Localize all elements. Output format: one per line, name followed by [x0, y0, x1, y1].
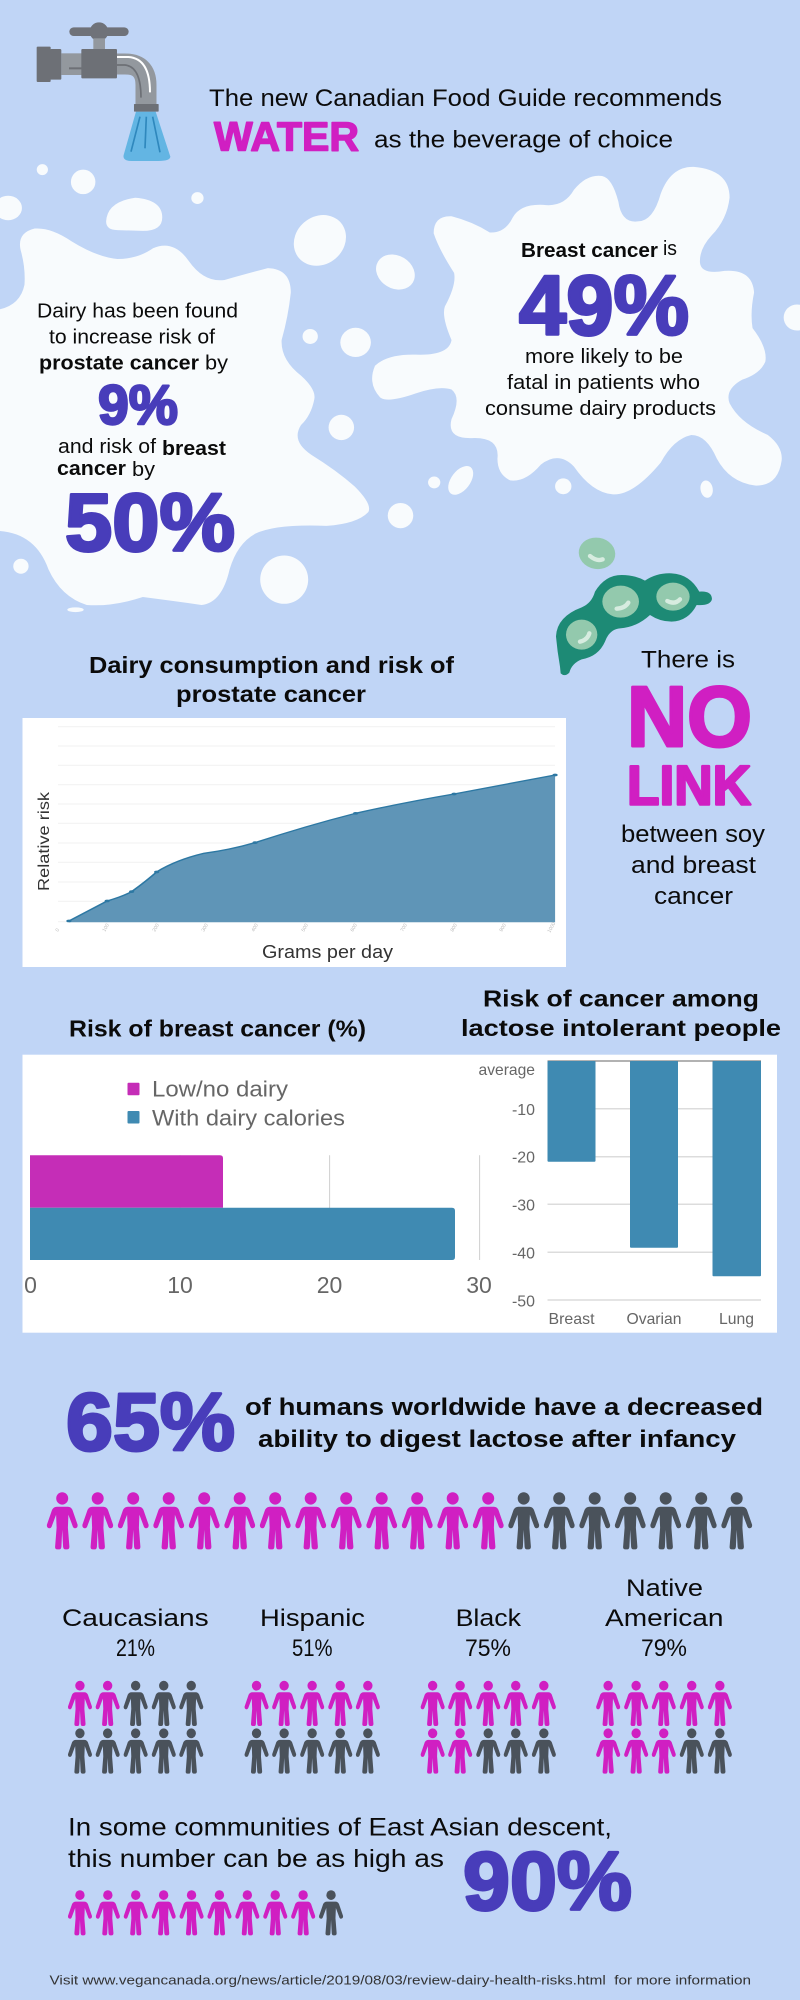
icon: soybean pod	[556, 535, 712, 675]
x axis tick labels: 300	[201, 923, 210, 933]
heading: dairy consumption chart	[89, 652, 454, 707]
callout: no link between soy and breast cancer: between soy	[621, 821, 765, 848]
group: Hispanic 51%: 51%	[292, 1635, 333, 1662]
axis values	[24, 1272, 492, 1298]
milk splash background	[0, 164, 800, 612]
x axis categories: Ovarian	[626, 1311, 682, 1328]
group: Native American 79%: 79%	[641, 1635, 687, 1662]
text block: prostate and breast risk: breast	[162, 438, 226, 460]
group: Black 75%	[421, 1605, 556, 1774]
group: Caucasians 21%: 21%	[116, 1635, 155, 1662]
bar chart: cancer risk among lactose intolerant	[478, 1061, 761, 1328]
splash: right blob	[372, 167, 782, 494]
y axis label: Relative risk	[36, 791, 53, 891]
text block: prostate and breast risk: prostate cancer	[39, 352, 199, 374]
x axis tick labels: 900	[499, 923, 508, 933]
x axis categories: Lung	[719, 1311, 754, 1328]
pictogram: 2 of 10	[68, 1681, 203, 1774]
callout: no link between soy and breast cancer	[621, 646, 765, 910]
x axis tick labels: 0	[55, 927, 61, 933]
callout: no link between soy and breast cancer: LINK	[627, 754, 751, 816]
callout: no link between soy and breast cancer: NO	[627, 670, 752, 765]
splash: left blob	[0, 228, 369, 605]
text block: breast cancer fatality: consume dairy products	[485, 398, 716, 420]
heading: risk among lactose intolerant: lactose intolerant people	[461, 1015, 781, 1041]
y axis values: -50	[512, 1294, 535, 1311]
pictogram: 5 of 10	[245, 1681, 380, 1774]
x axis tick labels: 100	[102, 923, 111, 933]
axis values: 30	[466, 1272, 492, 1298]
heading: food guide recommends water: The new Canadian Food Guide recommends	[209, 85, 722, 112]
legend	[128, 1077, 345, 1131]
heading: food guide recommends water	[209, 85, 722, 160]
heading: dairy consumption chart: prostate cancer	[176, 681, 366, 707]
axis values: 20	[317, 1272, 342, 1298]
text block: breast cancer fatality: is	[663, 238, 677, 260]
stat: 65 percent lactose: of humans worldwide have a decreased	[245, 1394, 763, 1421]
x axis categories	[548, 1311, 754, 1328]
x axis tick labels: 600	[350, 923, 359, 933]
group: Black 75%: 75%	[465, 1635, 511, 1662]
splash: droplets	[0, 164, 800, 612]
stat: 65 percent lactose: 65%	[66, 1377, 235, 1468]
group: Caucasians 21%	[62, 1605, 209, 1774]
text block: prostate and breast risk: 50%	[65, 478, 235, 568]
pictogram: 8 of 10	[596, 1681, 732, 1774]
axis values: 10	[167, 1272, 193, 1298]
pictogram: 7 of 10	[421, 1681, 556, 1774]
heading: risk among lactose intolerant: Risk of cancer among	[483, 986, 759, 1012]
heading: food guide recommends water: as the beverage of choice	[374, 126, 673, 154]
stat: 65 percent lactose: ability to digest lactose after infancy	[258, 1426, 736, 1453]
text block: East Asian descent: this number can be as high as	[68, 1845, 444, 1873]
group: Black 75%: Black	[456, 1605, 522, 1632]
group: Native American 79%	[596, 1575, 732, 1774]
x axis categories: Breast	[548, 1311, 595, 1328]
axis values: 0	[24, 1272, 37, 1298]
x axis tick labels: 1000	[547, 921, 557, 934]
pictogram: 9 of 10 people	[68, 1890, 343, 1935]
x axis tick labels: 400	[251, 923, 260, 933]
text block: breast cancer fatality	[485, 238, 716, 420]
callout: no link between soy and breast cancer: and breast	[631, 852, 756, 879]
text block: East Asian descent: In some communities of East Asian descent,	[68, 1814, 612, 1842]
stat: 90 percent: 90%	[463, 1834, 632, 1928]
panel: white chart card	[22, 1055, 777, 1333]
text block: breast cancer fatality: fatal in patients who	[507, 372, 700, 394]
text block: prostate and breast risk: by	[132, 459, 155, 481]
y axis values: average	[478, 1062, 535, 1079]
y axis values: -40	[512, 1246, 535, 1263]
x axis tick labels: 800	[450, 923, 459, 933]
x axis tick labels: 200	[152, 923, 161, 933]
x axis label: Grams per day	[262, 942, 393, 962]
y axis values: -10	[512, 1102, 535, 1119]
text block: breast cancer fatality: more likely to be	[525, 346, 683, 368]
group: Native American 79%: American	[605, 1605, 724, 1632]
heading: dairy consumption chart: Dairy consumption and risk of	[89, 652, 454, 678]
icon: water faucet	[37, 22, 170, 161]
text block: prostate and breast risk: to increase risk of	[49, 326, 215, 348]
text block: prostate and breast risk: by	[205, 352, 228, 374]
x axis tick labels	[55, 921, 557, 934]
bar chart: breast cancer risk	[24, 1077, 492, 1298]
y axis values: -30	[512, 1198, 535, 1215]
x axis tick labels: 500	[301, 923, 310, 933]
text block: prostate and breast risk	[37, 300, 238, 568]
text block: prostate and breast risk: cancer	[57, 458, 126, 480]
text block: prostate and breast risk: Dairy has been found	[37, 300, 238, 322]
group: Native American 79%: Native	[626, 1575, 703, 1602]
text block: prostate and breast risk: 9%	[98, 373, 178, 436]
stat: 65 percent lactose	[66, 1377, 763, 1468]
heading: food guide recommends water: WATER	[214, 114, 359, 160]
pictogram: 13 of 20 people	[47, 1492, 752, 1549]
y axis values: -20	[512, 1149, 535, 1166]
heading: risk of breast cancer: Risk of breast cancer (%)	[69, 1016, 366, 1042]
legend: With dairy calories	[152, 1106, 345, 1131]
panel: prostate cancer area chart	[22, 718, 566, 967]
area series	[66, 774, 558, 922]
group: Hispanic 51%: Hispanic	[260, 1605, 365, 1632]
text block: breast cancer fatality: 49%	[519, 258, 689, 352]
group: Caucasians 21%: Caucasians	[62, 1605, 209, 1632]
group: Hispanic 51%	[245, 1605, 380, 1774]
text block: East Asian descent	[68, 1814, 612, 1873]
heading: risk among lactose intolerant	[461, 986, 781, 1041]
callout: no link between soy and breast cancer: cancer	[654, 883, 733, 910]
y axis values	[478, 1062, 535, 1311]
legend: Low/no dairy	[152, 1077, 288, 1102]
x axis tick labels: 700	[400, 923, 409, 933]
text block: breast cancer fatality: Breast cancer	[521, 240, 658, 262]
callout: no link between soy and breast cancer: There is	[641, 646, 735, 674]
footer: source link: Visit www.vegancanada.org/news/article/2019/08/03/review-dairy-health-risks.html for more information	[50, 1974, 751, 1988]
text block: prostate and breast risk: and risk of	[58, 436, 156, 458]
